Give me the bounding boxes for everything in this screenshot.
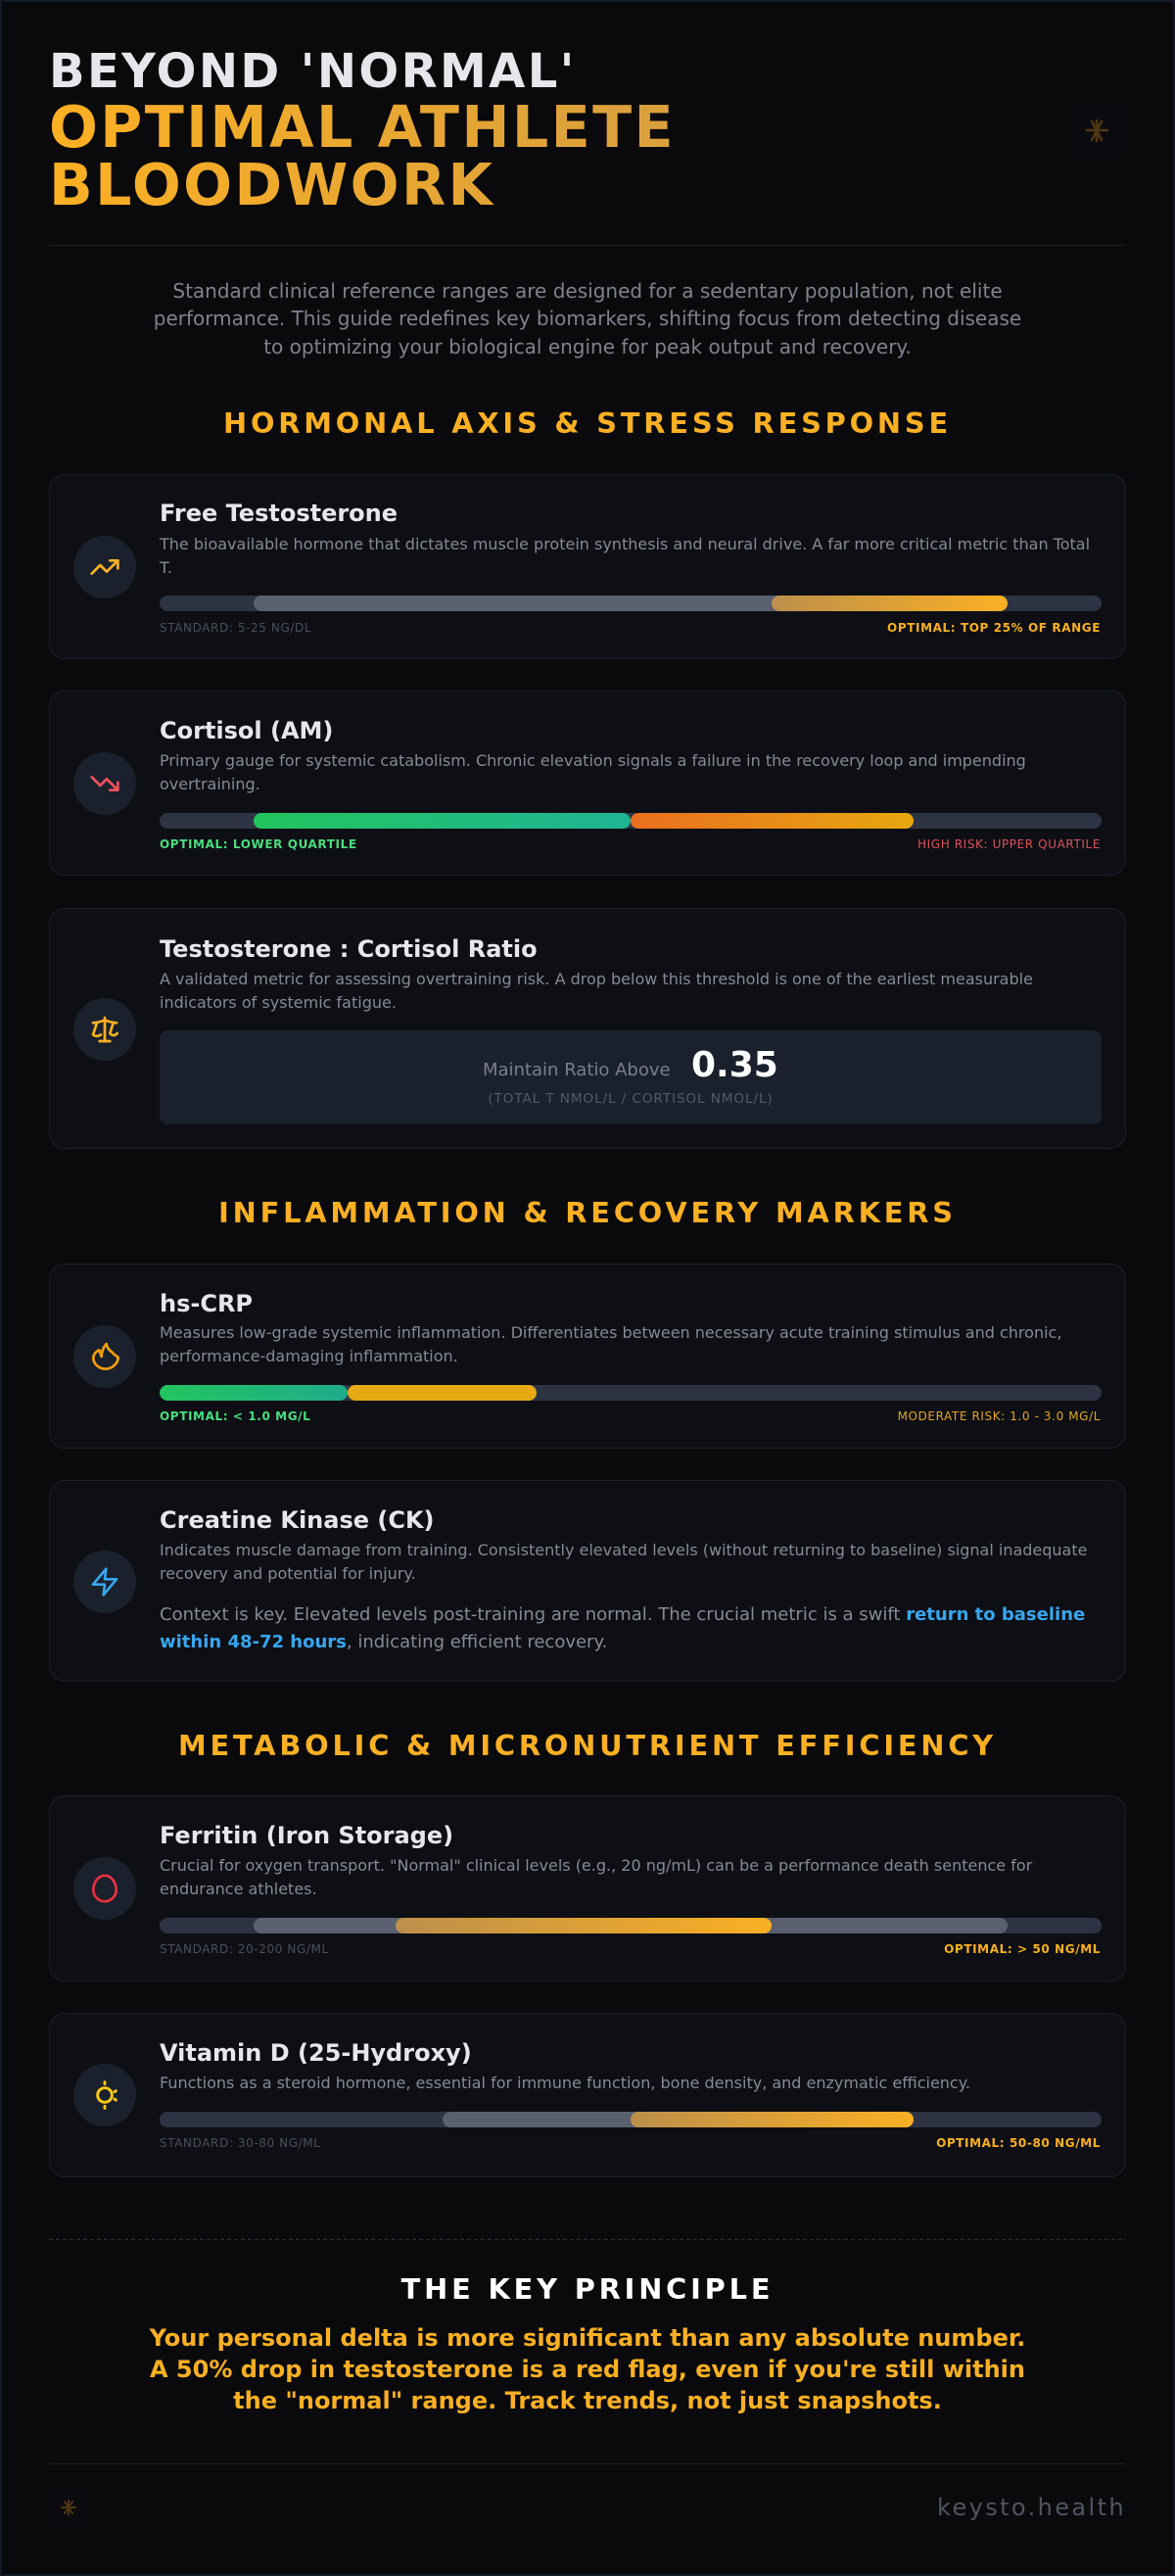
marker name: Testosterone : Cortisol Ratio [160, 935, 538, 963]
label: optimal range: OPTIMAL: LOWER QUARTILE [160, 837, 357, 851]
label: moderate risk: MODERATE RISK: 1.0 - 3.0 MG/L [898, 1409, 1101, 1423]
panel: hs-CRP [49, 1264, 1126, 1449]
label: optimal range: OPTIMAL: < 1.0 MG/L [160, 1409, 310, 1423]
intro text: to optimizing your biological engine for peak output and recovery. [263, 335, 912, 358]
panel: testosterone cortisol ratio [49, 908, 1126, 1149]
label: high risk: HIGH RISK: UPPER QUARTILE [917, 837, 1101, 851]
label: optimal range: OPTIMAL: 50-80 NG/ML [936, 2136, 1101, 2150]
icon: flame [73, 1325, 136, 1388]
key principle statement: Your personal delta is more significant than any absolute number. [150, 2324, 1025, 2352]
label: standard range: STANDARD: 30-80 NG/ML [160, 2136, 321, 2150]
footer divider [49, 2463, 1126, 2464]
key principle statement: the "normal" range. Track trends, not just snapshots. [233, 2387, 942, 2414]
icon: header logo [1085, 119, 1108, 143]
range bar [160, 813, 1102, 829]
label: standard range: STANDARD: 5-25 NG/DL [160, 621, 311, 635]
marker description: Crucial for oxygen transport. "Normal" clinical levels (e.g., 20 ng/mL) can be a performance death sentence for endurance athletes. [160, 1856, 1032, 1898]
marker description: Measures low-grade systemic inflammation. Differentiates between necessary acute training stimulus and chronic, performance-damaging inflammation. [160, 1323, 1061, 1365]
icon: droplet [73, 1857, 136, 1920]
panel: free testosterone [49, 474, 1126, 659]
panel: cortisol [49, 691, 1126, 876]
intro text: Standard clinical reference ranges are designed for a sedentary population, not elite [172, 279, 1003, 303]
intro text [154, 279, 1021, 358]
icon: trending down [73, 752, 136, 815]
heading: inflammation: INFLAMMATION & RECOVERY MARKERS [218, 1196, 957, 1229]
marker name: Vitamin D (25-Hydroxy) [160, 2039, 472, 2067]
ratio value: 0.35 [691, 1045, 778, 1085]
range bar [160, 2112, 1102, 2127]
range bar [160, 1918, 1102, 1933]
key principle statement [149, 2324, 1025, 2414]
range bar [160, 1385, 1102, 1401]
panel: vitamin D [49, 2013, 1126, 2177]
ratio callout [160, 1030, 1102, 1124]
marker description: Primary gauge for systemic catabolism. Chronic elevation signals a failure in the recovery loop and impending overtraining. [160, 751, 1026, 793]
panel: ferritin [49, 1795, 1126, 1981]
panel: creatine kinase [49, 1480, 1126, 1682]
icon: footer logo [61, 2500, 76, 2515]
marker description: Indicates muscle damage from training. Consistently elevated levels (without returning to baseline) signal inadequate recovery and potential for injury. [160, 1541, 1087, 1583]
header title: OPTIMAL ATHLETE BLOODWORK [49, 94, 676, 218]
marker description: The bioavailable hormone that dictates muscle protein synthesis and neural drive. A far more critical metric than Total T. [160, 535, 1090, 577]
ratio formula: (TOTAL T NMOL/L / CORTISOL NMOL/L) [488, 1091, 774, 1107]
icon: scale [73, 998, 136, 1061]
marker name: hs-CRP [160, 1290, 253, 1317]
header divider [49, 245, 1126, 246]
footer brand: keysto.health [937, 2494, 1126, 2521]
header title: BEYOND 'NORMAL' [49, 44, 577, 99]
icon: lightning bolt [73, 1550, 136, 1613]
marker description: A validated metric for assessing overtraining risk. A drop below this threshold is one of the earliest measurable indicators of systemic fatigue. [160, 970, 1033, 1012]
range bar [160, 596, 1102, 611]
ratio label: Maintain Ratio Above [483, 1060, 671, 1080]
heading: key principle: THE KEY PRINCIPLE [401, 2272, 774, 2306]
icon: sun [73, 2064, 136, 2126]
marker name: Ferritin (Iron Storage) [160, 1822, 453, 1849]
label: standard range: STANDARD: 20-200 NG/ML [160, 1942, 329, 1956]
heading: metabolic: METABOLIC & MICRONUTRIENT EFFICIENCY [178, 1729, 997, 1762]
label: optimal range: OPTIMAL: TOP 25% OF RANGE [887, 621, 1101, 635]
marker name: Cortisol (AM) [160, 717, 333, 744]
intro text: performance. This guide redefines key biomarkers, shifting focus from detecting disease [154, 307, 1021, 330]
marker name: Creatine Kinase (CK) [160, 1506, 435, 1534]
heading: hormonal axis: HORMONAL AXIS & STRESS RESPONSE [223, 406, 952, 440]
key principle statement: A 50% drop in testosterone is a red flag, even if you're still within [150, 2356, 1025, 2383]
label: optimal range: OPTIMAL: > 50 NG/ML [944, 1942, 1101, 1956]
marker description: Functions as a steroid hormone, essential for immune function, bone density, and enzymatic efficiency. [160, 2074, 970, 2092]
icon: trending up [73, 536, 136, 598]
context note: Context is key. Elevated levels post-training are normal. The crucial metric is a swift return to baseline within 48-72 hours, indicating efficient recovery. [160, 1604, 1085, 1652]
marker name: Free Testosterone [160, 500, 398, 527]
